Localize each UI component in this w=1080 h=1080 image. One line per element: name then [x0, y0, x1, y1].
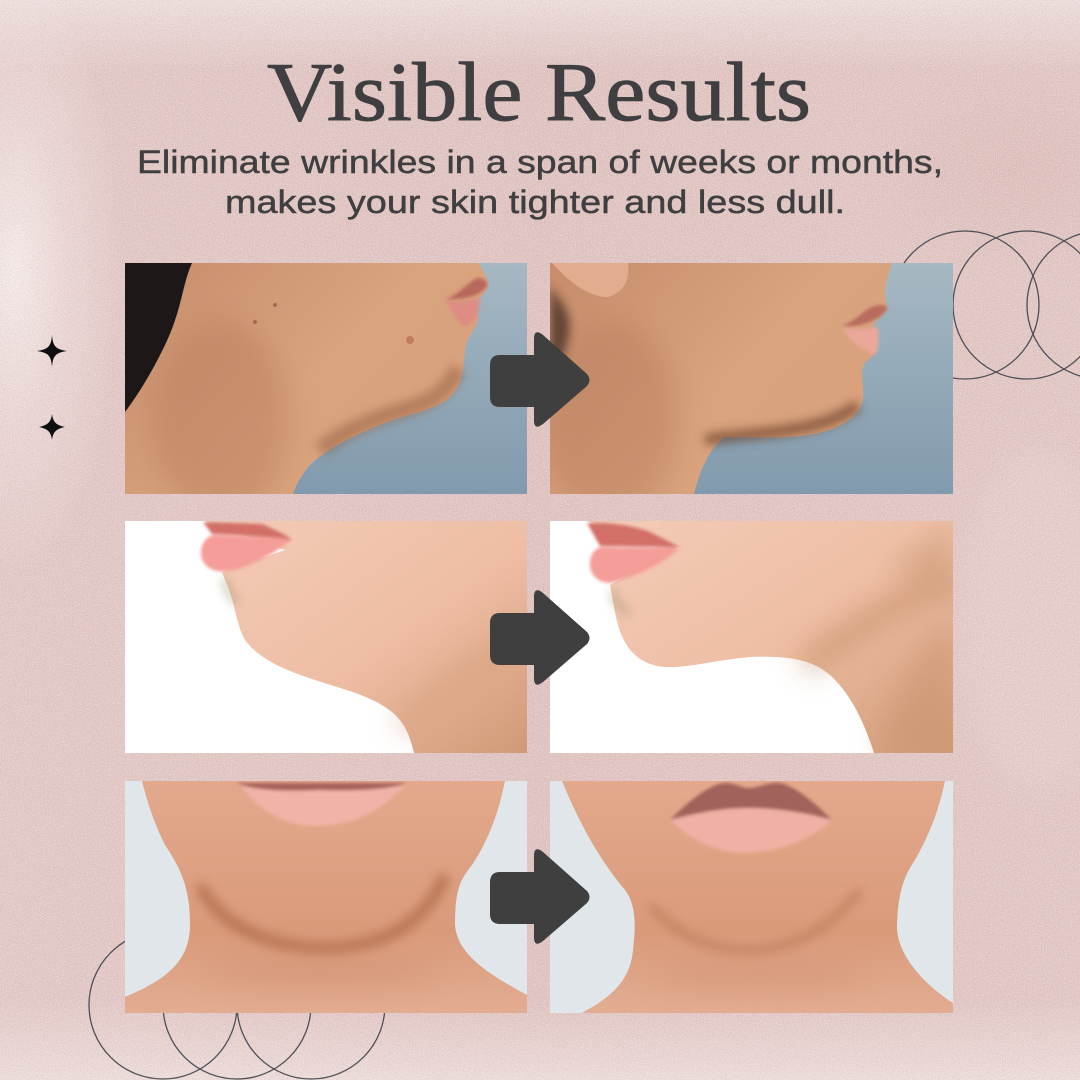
subtitle: [137, 144, 943, 220]
icon: sparkle large: [37, 335, 67, 367]
arrow: row 1: [490, 332, 590, 427]
photo: row 1 before: [125, 263, 527, 494]
arrow: row 3: [490, 849, 590, 944]
title: Visible Results: [267, 46, 811, 139]
arrow: row 2: [490, 590, 590, 685]
decorative circles: bottom left: [89, 931, 385, 1079]
subtitle: makes your skin tighter and less dull.: [225, 184, 845, 220]
photo: row 3 after: [550, 781, 953, 1013]
photo: row 2 before: [125, 521, 527, 753]
icon: sparkle small: [39, 414, 65, 440]
decorative circles: top right: [891, 231, 1080, 379]
photo: row 2 after: [550, 521, 953, 753]
photo: row 3 before: [125, 781, 527, 1013]
subtitle: Eliminate wrinkles in a span of weeks or months,: [137, 144, 943, 180]
photo: row 1 after: [550, 263, 953, 494]
